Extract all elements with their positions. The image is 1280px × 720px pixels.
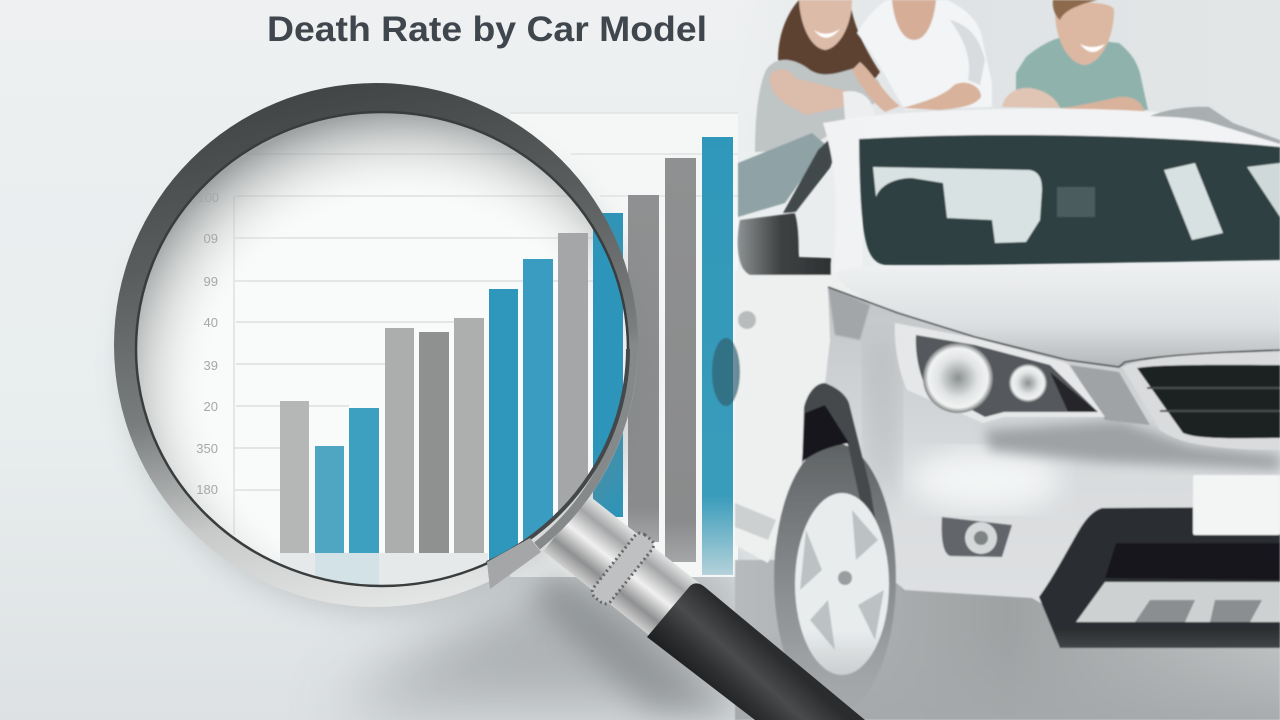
car and family photo illustration xyxy=(712,0,1280,720)
axis labels: 20 xyxy=(204,399,218,414)
lens ring xyxy=(114,83,638,607)
title: Death Rate by Car Model xyxy=(267,10,707,49)
hood xyxy=(835,262,1280,367)
person: woman xyxy=(738,0,900,217)
fog light xyxy=(942,517,1012,557)
roof rail xyxy=(1150,107,1280,144)
license plate xyxy=(1193,475,1280,535)
ring to handle socket xyxy=(487,538,541,589)
lower mesh xyxy=(1105,543,1280,580)
axis labels: 180 xyxy=(196,482,218,497)
magnifying glass xyxy=(114,83,865,720)
fender and bumper body xyxy=(825,287,1280,640)
door sill trim xyxy=(735,503,776,540)
lens glass base xyxy=(136,112,628,586)
roof xyxy=(823,109,1280,150)
headlight xyxy=(895,323,1105,423)
axis labels: 100 xyxy=(197,190,219,205)
background tint behind family xyxy=(735,0,1280,150)
body highlights and shade xyxy=(865,340,1280,510)
handle shadow xyxy=(530,565,740,712)
ground under car xyxy=(735,560,1280,720)
car side door xyxy=(735,262,880,563)
bars in lens xyxy=(280,213,623,563)
dark reflection xyxy=(712,338,740,406)
bottom fade of car into floor xyxy=(735,630,1280,720)
hood edge line xyxy=(828,287,1280,367)
side window frame xyxy=(783,133,838,213)
axis labels: 350 xyxy=(196,441,218,456)
floor shadow xyxy=(330,560,740,710)
windshield interior and seats xyxy=(873,163,1280,243)
glass vignette xyxy=(136,112,628,586)
person: man xyxy=(857,0,992,110)
ring inner dark line xyxy=(136,112,628,586)
chrome skid xyxy=(1076,582,1280,622)
side window xyxy=(793,167,836,257)
bars outside the lens xyxy=(593,137,733,575)
fender shadow xyxy=(828,287,870,340)
grille surround xyxy=(1122,352,1280,450)
wheel arch xyxy=(802,383,884,575)
axis labels xyxy=(196,193,218,494)
chart base reflection xyxy=(280,553,488,586)
handle xyxy=(541,492,865,720)
lens drop shadow xyxy=(123,115,647,615)
axis labels: 40 xyxy=(204,315,218,330)
arch interior xyxy=(802,405,849,462)
axis labels: 99 xyxy=(204,274,218,289)
tyre xyxy=(774,443,896,713)
windshield xyxy=(859,135,1280,265)
ring lower right dark arc xyxy=(487,349,628,563)
metal ferrule xyxy=(541,492,702,643)
chart seen through lens xyxy=(136,112,660,586)
person: boy xyxy=(1002,0,1148,116)
axis labels: 09 xyxy=(204,231,218,246)
ring right side shade xyxy=(537,345,633,546)
door handle detail xyxy=(738,311,756,329)
lower intake xyxy=(1039,507,1280,648)
rim xyxy=(795,493,889,675)
grille xyxy=(1137,365,1280,438)
black grip xyxy=(647,583,865,720)
chart panel backdrop xyxy=(510,113,738,577)
side mirror xyxy=(738,213,831,275)
A pillar xyxy=(823,118,862,285)
axis labels: 39 xyxy=(204,358,218,373)
axis labels: - xyxy=(215,523,219,538)
gridlines xyxy=(233,153,593,535)
